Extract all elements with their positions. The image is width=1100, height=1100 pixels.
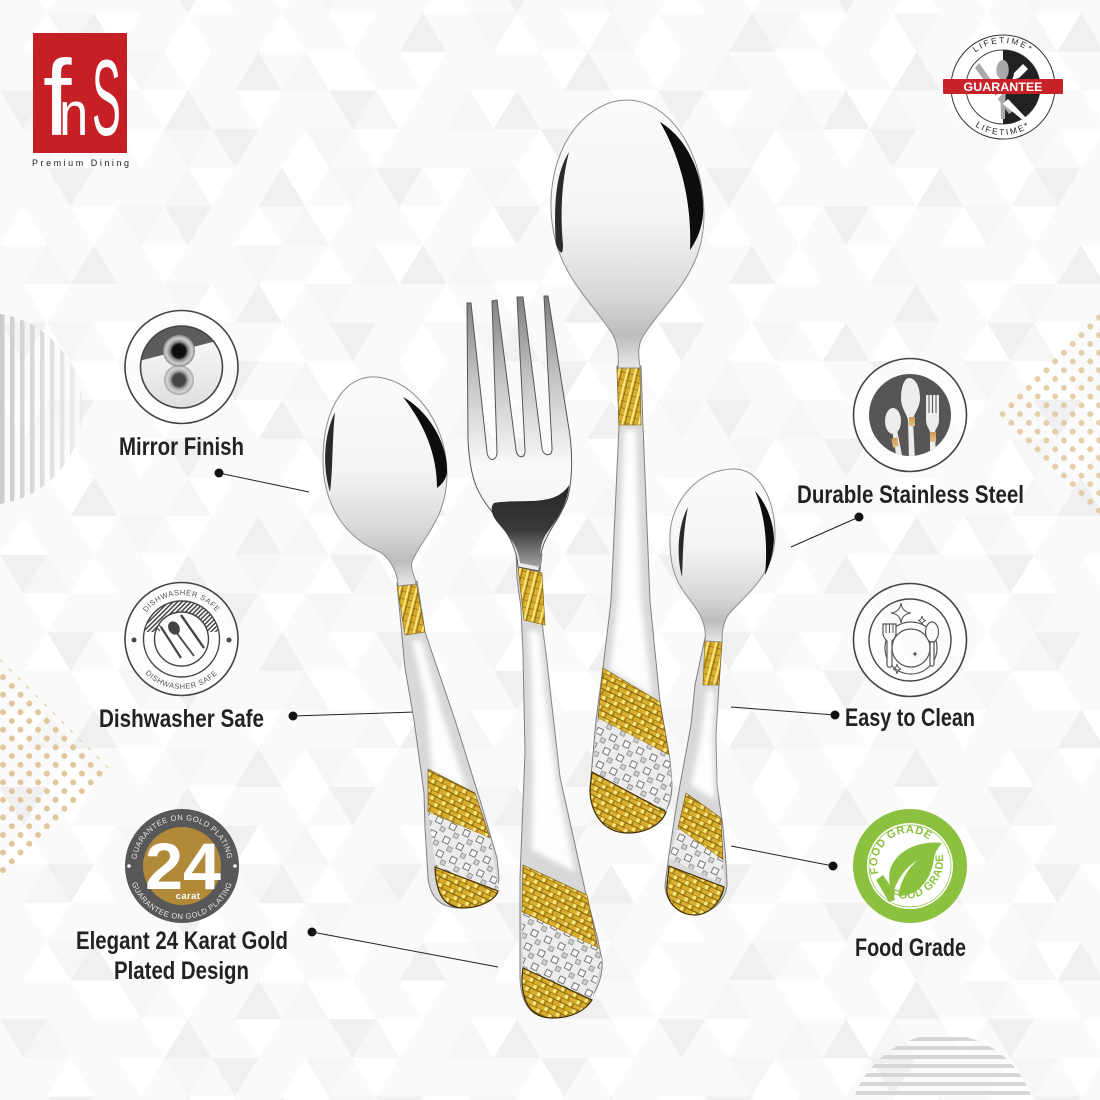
logo: FnS Premium Dining <box>32 33 129 168</box>
logo: FnS Premium Dining: f <box>43 39 72 159</box>
leader line: food grade <box>731 846 838 870</box>
decoration: left striped half circle <box>0 314 82 504</box>
fork <box>467 296 602 1018</box>
label: dishwasher safe: Dishwasher Safe <box>99 705 264 733</box>
logo: FnS Premium Dining: S <box>92 39 121 159</box>
icon: dishwasher safe: DISHWASHER SAFE <box>142 590 220 612</box>
decoration: left gold dots <box>0 659 113 885</box>
label: elegant 24 karat gold plated design: Plated Design <box>114 957 249 985</box>
leader line: durable stainless steel <box>791 512 864 547</box>
icon: 24 carat gold: GUARANTEE ON GOLD PLATING <box>132 882 232 919</box>
label: durable stainless steel: Durable Stainless Steel <box>797 481 1024 509</box>
label: food grade: Food Grade <box>855 934 966 962</box>
icon: food grade: FOOD GRADE <box>870 825 932 874</box>
large spoon <box>551 100 704 833</box>
icon: food grade <box>853 809 967 923</box>
icon: mirror finish <box>125 310 238 424</box>
logo: FnS Premium Dining: Premium Dining <box>32 158 129 168</box>
icon: 24 carat gold: 24 <box>145 829 221 903</box>
decoration: bottom striped half circle <box>853 1034 1033 1100</box>
icon: dishwasher safe: DISHWASHER SAFE <box>146 670 218 689</box>
label: elegant 24 karat gold plated design: Elegant 24 Karat Gold <box>76 927 288 955</box>
leader line: easy to clean <box>731 707 840 720</box>
decoration: right gold dots <box>992 310 1100 522</box>
badge: lifetime guarantee <box>943 34 1063 140</box>
badge: lifetime guarantee: LIFETIME* <box>972 37 1032 52</box>
logo: FnS Premium Dining: n <box>59 80 88 149</box>
leader line: dishwasher safe <box>288 712 415 720</box>
icon: 24 carat gold <box>125 809 239 923</box>
icon: dishwasher safe <box>124 582 239 696</box>
right small spoon <box>665 469 775 915</box>
icon: food grade: FOOD GRADE <box>893 854 944 899</box>
label: easy to clean: Easy to Clean <box>845 704 975 732</box>
badge: lifetime guarantee: GUARANTEE <box>964 80 1042 94</box>
icon: 24 carat gold: GUARANTEE ON GOLD PLATING <box>132 814 232 859</box>
label: elegant 24 karat gold plated design <box>76 927 288 985</box>
icon: 24 carat gold: carat <box>176 891 201 902</box>
leader line: mirror finish <box>214 468 309 492</box>
badge: lifetime guarantee: LIFETIME* <box>976 122 1028 135</box>
icon: easy to clean <box>854 584 966 696</box>
left small spoon <box>323 377 499 908</box>
icon: durable stainless steel <box>854 358 966 472</box>
label: mirror finish: Mirror Finish <box>119 433 244 461</box>
leader line: 24 karat gold <box>308 928 498 967</box>
